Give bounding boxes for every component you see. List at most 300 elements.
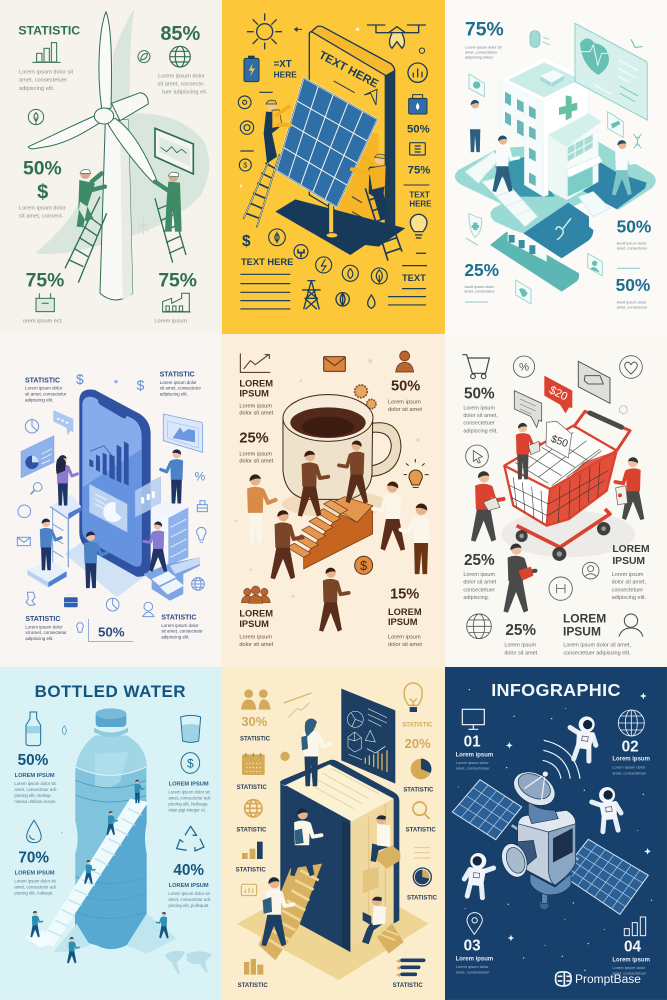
icon: briefcase <box>64 595 78 607</box>
text block: right 2: Lorem ipsum dolor sit <box>168 891 210 896</box>
worker left <box>264 100 290 163</box>
text blocks: statistic: Lorem ipsum dolor <box>25 624 63 629</box>
icon: pill <box>530 31 550 47</box>
phone <box>79 389 151 577</box>
heading: lorem ipsum top left: LOREM <box>239 379 273 389</box>
text block: 75%: adipiscing elieuz <box>465 55 493 59</box>
red box <box>518 567 533 581</box>
syringe <box>466 238 478 245</box>
ring <box>619 406 627 414</box>
text block: 50% upper: amet, consectetur <box>617 246 648 250</box>
label: statistic gold: STATISTIC <box>402 722 433 728</box>
green background shapes <box>35 8 209 254</box>
stat: 20%: 20% <box>405 736 431 751</box>
$50 tag: $50 <box>549 434 569 450</box>
text block: lorem ipsum bottom: Lorem ipsum dolor sit amet, <box>563 643 631 649</box>
icon: bar circle <box>408 63 427 82</box>
building <box>499 57 602 200</box>
stat: 85%: 85% <box>160 23 201 45</box>
text block: 75%: amet, consectetuer <box>465 50 498 54</box>
text block: left 2: Lorem ipsum dolor sit <box>14 878 57 883</box>
text block: 50%: Lorem ipsum <box>463 405 495 411</box>
label: statistic left column <box>236 737 271 989</box>
text block: 50%: adipiscing elit. <box>463 428 498 434</box>
text block: left 2: amet, consectetur adi <box>14 885 56 890</box>
icon: leaf <box>336 293 349 306</box>
monitor panel <box>155 128 193 174</box>
label: statistic left column: STATISTIC <box>238 983 268 989</box>
icon: document <box>410 143 425 155</box>
text blocks: statistic: adipiscing elit. <box>25 397 53 402</box>
platform left top <box>50 494 82 567</box>
label: statistic left column: STATISTIC <box>236 868 266 874</box>
text block: 25%: Aunit ipsum dolor <box>464 285 495 289</box>
canopy <box>566 156 602 177</box>
stairs left <box>465 152 610 227</box>
text block: bottom right: Lorem ipsum <box>154 319 187 325</box>
dots <box>235 359 420 598</box>
text block: lorem ipsum bottom: consectetuer adipiscing elit. <box>563 650 631 656</box>
floating bars card <box>135 477 161 517</box>
number 04: 04 <box>624 939 642 956</box>
text blocks: statistic: Lorem ipsum dolor <box>25 386 63 391</box>
text block: 85%: tuer adipiscing eli. <box>162 90 208 96</box>
walkers <box>30 780 169 963</box>
headings: statistic: STATISTIC <box>25 377 60 384</box>
icon: people <box>241 689 271 710</box>
text blocks: statistic: sit amet, consectetur <box>161 629 203 634</box>
person lower backpack <box>263 897 272 914</box>
solar panel <box>276 78 378 207</box>
icon: person <box>396 351 414 372</box>
astronaut top <box>566 714 600 762</box>
data card <box>575 23 647 120</box>
ground tiles <box>25 914 177 954</box>
icon: calendar <box>242 753 265 775</box>
label: statistic right column: STATISTIC <box>403 788 434 794</box>
billboard label: TEXT HERE <box>317 48 381 91</box>
text block: top left: dolor sit amet <box>239 410 274 416</box>
stat: 30%: 30% <box>241 714 268 729</box>
text block 02: amet, consectetuer <box>612 770 647 775</box>
text block: 50%: Lorem ipsum dolor <box>19 205 66 211</box>
label: statistic right column: STATISTIC <box>406 828 436 834</box>
text block: 50%: sit amet, consect- <box>19 213 63 219</box>
heading: lorem ipsum bottom: IPSUM <box>563 624 601 638</box>
subhead 02: Lorem ipsum <box>612 757 650 763</box>
heading: lorem ipsum bottom right: LOREM <box>388 607 422 617</box>
text block: 50%: dolor sit amet <box>388 407 422 413</box>
text block 01: Lorem ipsum dolor <box>456 760 489 765</box>
person climbing 3 <box>271 510 302 579</box>
heading: lorem ipsum bottom left: IPSUM <box>239 619 269 629</box>
person man tower <box>161 449 183 503</box>
heading: lorem ipsum right: LOREM <box>612 544 650 555</box>
person woman right <box>401 503 430 574</box>
number 01: 01 <box>464 734 481 751</box>
icon: list bars <box>396 959 424 977</box>
dollar glyphs: $ <box>137 377 145 393</box>
dollar glyphs <box>76 371 145 393</box>
stairs right <box>363 845 404 954</box>
building windows <box>505 92 536 186</box>
text blocks: statistic <box>25 380 203 641</box>
ground shadow <box>275 199 405 255</box>
panel: education book <box>222 667 445 1000</box>
stat: 25%: 25% <box>239 430 269 446</box>
icon glyphs <box>472 81 620 297</box>
text block: 75%: Lorem ipsum dolor sit <box>465 46 503 50</box>
marks <box>284 693 311 717</box>
icon: heart badge <box>620 356 642 378</box>
stat: 75% right: 75% <box>158 271 197 292</box>
ground shape <box>455 142 656 258</box>
person mid <box>290 808 321 876</box>
icons: left badges <box>238 92 273 171</box>
icon: heart knot <box>556 218 571 240</box>
floor shadow <box>502 511 635 557</box>
shopping bag <box>616 486 628 505</box>
walker bottom <box>67 937 79 963</box>
person suit <box>504 544 535 613</box>
label: statistic right column <box>393 788 438 989</box>
stat: 50%: 50% <box>464 386 495 403</box>
text block: left 2: piscing elit, Aulisept. <box>14 891 53 896</box>
box left <box>483 497 500 511</box>
image card <box>163 414 203 452</box>
text block: lorem ipsum right: consectetuer <box>612 587 643 593</box>
stat: 70%: 70% <box>18 849 49 866</box>
book <box>280 760 399 952</box>
walker right <box>156 912 169 938</box>
icon: factory <box>163 293 191 312</box>
text block: 50% lower: Aunit ipsum dolor <box>617 300 647 304</box>
icon: team <box>241 586 270 603</box>
icon: battery <box>36 293 54 312</box>
person woman left hair <box>56 458 66 474</box>
icon: cursor badge <box>466 445 488 468</box>
text block: 50% upper: Aunit ipsum dolor <box>617 242 647 246</box>
icon: bulb <box>404 683 422 712</box>
billboard <box>309 26 395 240</box>
label: statistic right column: STATISTIC <box>407 896 438 902</box>
gray tag card <box>578 361 610 403</box>
icon: bars bottom <box>244 959 263 975</box>
green cross <box>559 95 577 121</box>
heading: lorem ipsum right: IPSUM <box>612 556 645 567</box>
support pole <box>326 204 338 238</box>
subhead 01: Lorem ipsum <box>456 753 493 759</box>
stat: 50%: 50% <box>391 379 420 395</box>
icon: monitor <box>462 709 484 729</box>
dot <box>114 380 118 383</box>
icon: envelope <box>324 357 345 371</box>
label: statistic left column: STATISTIC <box>237 785 267 791</box>
number 03: 03 <box>464 937 481 954</box>
heading: lorem ipsum bottom right: IPSUM <box>388 617 418 627</box>
white staircase <box>42 799 148 947</box>
subhead 04: Lorem ipsum <box>612 957 650 963</box>
heading: text here: TEXT HERE <box>241 257 293 267</box>
headings: statistic: STATISTIC <box>161 615 196 622</box>
heading: statistic: STATISTIC <box>18 23 80 37</box>
text block: 50% lower: amet, consectetur <box>617 305 648 309</box>
staircase <box>287 497 373 569</box>
person lower <box>262 877 293 946</box>
gears <box>355 385 376 409</box>
text blocks: statistic: sit amet, consectetur <box>25 391 67 396</box>
panel: coffee teamwork <box>222 334 445 667</box>
walker top <box>135 780 144 803</box>
stat: 75%: 75% <box>408 165 430 177</box>
icon: bottle <box>26 712 41 746</box>
label: text here right <box>404 185 432 209</box>
stat: 75% left: 75% <box>26 271 64 292</box>
text block: 85%: Lorem ipsum dolor <box>158 73 205 79</box>
icon: user outline <box>619 614 643 637</box>
text block: bottom left: dolor sit amet <box>239 642 274 648</box>
lines: text here <box>240 266 427 309</box>
ground diamond <box>237 897 429 980</box>
ladder right <box>365 187 402 261</box>
turbine <box>28 12 157 300</box>
icon: drop <box>27 820 41 843</box>
satellite <box>497 765 578 910</box>
label: text here right: HERE <box>409 200 432 209</box>
person top hair and backpack <box>301 719 317 750</box>
icon: sun <box>247 13 282 49</box>
text block: right 1: piscing elit, Nullsege <box>168 801 208 806</box>
stairs lower left <box>259 864 322 960</box>
text blocks: statistic: sit amet, consectetur <box>160 386 202 391</box>
person man right <box>373 482 405 551</box>
icon: glass <box>181 715 201 742</box>
person walking bottom <box>319 568 349 632</box>
label: statistic left column: STATISTIC <box>236 827 267 833</box>
icon: dollar coin: $ <box>187 756 194 770</box>
icon: power tower <box>302 281 321 309</box>
astronaut left <box>463 852 495 899</box>
panel: hospital <box>445 0 667 334</box>
wing windows <box>568 134 593 197</box>
wing window grid <box>568 139 593 157</box>
text blocks: statistic: Lorem ipsum dolor <box>161 623 199 628</box>
icon: bars <box>242 842 263 859</box>
icon: dollar coin <box>355 556 373 574</box>
icon: chart card <box>241 884 257 896</box>
text block: left 1: piscing elit, Nutlegr <box>14 793 51 798</box>
dot <box>61 832 63 833</box>
icon: molecule <box>631 39 642 47</box>
label: statistic left column: STATISTIC <box>240 737 271 743</box>
label: text here left <box>274 59 297 80</box>
person man ladder <box>40 519 61 570</box>
text block: bottom left: orem ipsum ect. <box>23 319 63 325</box>
stat chart: 50% <box>88 619 133 641</box>
panel: wind turbine <box>0 0 222 334</box>
tower right <box>152 499 188 566</box>
red price bubble <box>544 376 572 413</box>
panel: satellite infographic <box>445 667 667 1000</box>
headings: statistic <box>25 372 196 623</box>
person top <box>303 719 331 786</box>
logo: brain mark <box>556 972 571 986</box>
text block: right 1: vitae pigi integer ut. <box>168 808 206 813</box>
text block 04: amet, consectetuer <box>612 970 647 975</box>
stat: 40%: 40% <box>173 862 204 879</box>
ladder left <box>244 155 279 227</box>
walker upper <box>106 811 117 835</box>
text block: right 2: piscing elit, pullsquat. <box>168 903 209 908</box>
text block 04: Lorem ipsum dolor <box>612 965 646 970</box>
small turbine glyph <box>137 215 150 235</box>
icon: outline cart <box>462 355 489 379</box>
person with bag right <box>615 457 644 520</box>
label: statistic right column: STATISTIC <box>393 983 423 989</box>
stat: 25%: 25% <box>464 260 499 280</box>
subhead: right 1: LOREM IPSUM <box>169 782 209 788</box>
person woman left <box>57 455 77 506</box>
panel: solar energy <box>222 0 445 334</box>
doctor 1 <box>469 100 490 152</box>
icons: bottom badges <box>269 229 387 284</box>
$50 tag <box>546 421 572 458</box>
person woman in cart <box>516 423 539 479</box>
dark floor patches <box>495 157 647 258</box>
icon: location pin <box>467 913 482 934</box>
stat: 75%: 75% <box>465 20 504 41</box>
panel: shopping cart <box>445 334 667 667</box>
percent glyph: % <box>195 470 206 484</box>
solar panel right <box>561 839 648 914</box>
text block: 85%: sit amet, consecte- <box>158 82 205 88</box>
lower slab <box>490 232 579 292</box>
dots <box>240 28 425 187</box>
subhead: left 2: LOREM IPSUM <box>15 870 55 876</box>
text block: bottom left: Lorem ipsum <box>239 634 272 640</box>
stat: 50% lower: 50% <box>616 275 650 295</box>
icon: percent badge: % <box>519 362 529 374</box>
text block: 25%: Lorem ipsum <box>239 452 272 458</box>
phone data card <box>89 484 127 532</box>
walker lower left <box>30 911 43 937</box>
coffee mug <box>283 395 401 499</box>
text block: 25% left: adipiscing. <box>463 595 490 601</box>
ladder right <box>155 198 186 263</box>
icon: bulb <box>410 214 427 253</box>
stat: 50%: 50% <box>18 752 49 769</box>
doctor 2 <box>492 136 519 192</box>
stat: 50%: 50% <box>407 123 430 135</box>
worker left <box>77 169 105 227</box>
text block: bottom right: Lorem ipsum <box>388 634 421 640</box>
text block: lorem ipsum right: dolor sit amet, <box>612 580 647 586</box>
label: text here right: TEXT <box>409 191 430 200</box>
icon cards <box>469 74 623 304</box>
badge dollar: $ <box>243 161 247 170</box>
text block: bottom right: dolor sit amet <box>388 642 422 648</box>
text block: 25% left: consectetuer <box>463 587 495 593</box>
stat: 15%: 15% <box>390 586 419 602</box>
person reading bottom <box>362 896 386 944</box>
icon: lines <box>414 848 430 858</box>
icon: pie badge <box>413 868 431 886</box>
icon: user badge <box>582 562 599 579</box>
stat: 50% upper: 50% <box>617 216 651 236</box>
icon: dollar: $ <box>37 181 48 203</box>
phone bar chart <box>89 441 129 486</box>
icon: dna <box>633 134 642 148</box>
divider <box>465 268 640 302</box>
person mid backpack <box>295 829 304 844</box>
text block: right 1: Lorem ipsum dolor sit <box>168 789 210 794</box>
signal arcs <box>543 740 580 779</box>
heading: lorem ipsum bottom left: LOREM <box>239 609 273 619</box>
text blocks: statistic: adipiscing elit. <box>161 635 189 640</box>
coin <box>280 752 290 761</box>
subhead: right 2: LOREM IPSUM <box>169 883 209 889</box>
icon: line chart <box>240 353 270 372</box>
label: text here left: HERE <box>274 70 297 80</box>
icon: leaf badge <box>138 51 150 63</box>
icon: globe <box>467 614 491 639</box>
icon: globe <box>170 46 190 67</box>
logo: promptbase: PromptBase <box>575 972 641 986</box>
text block: 50%: dolor sit amet, <box>463 413 498 419</box>
icon: bar chart <box>32 43 61 62</box>
icon: dollar coin: $ <box>360 559 367 573</box>
text block: top left: Lorem ipsum <box>239 403 272 409</box>
heading: lorem ipsum bottom: LOREM <box>563 612 606 626</box>
dollar glyphs: $ <box>76 371 84 387</box>
text blocks: statistic: adipiscing elit. <box>160 392 188 397</box>
icon: bars <box>624 917 646 936</box>
text block: statistic: adipiscing elit. <box>19 86 55 92</box>
solar panel left <box>452 780 522 840</box>
text block: lorem ipsum right: Lorem ipsum <box>612 572 644 578</box>
icon: arrow <box>295 28 302 31</box>
text block: 25% left: dolor sit amet <box>463 580 497 586</box>
headings: statistic: STATISTIC <box>160 372 195 379</box>
text block 02: Lorem ipsum dolor <box>612 764 646 769</box>
gray chat bubble <box>514 391 542 427</box>
stat: 25% bottom: 25% <box>505 622 536 639</box>
astronaut right <box>590 786 623 833</box>
text block: right 2: amet, consectetur adi- <box>168 897 212 902</box>
icon: sliders badge <box>549 577 572 600</box>
person woman left <box>247 474 275 543</box>
text block: 25% left: Lorem ipsum <box>463 572 495 578</box>
stars <box>458 689 652 971</box>
floor platform <box>65 537 150 597</box>
text block: 25%: dolor sit amet <box>239 459 274 465</box>
worker right <box>352 154 389 220</box>
text block: left 1: amet, consectetur adi- <box>14 787 58 792</box>
sparkle stars <box>506 693 651 941</box>
person climbing 2 <box>339 441 368 503</box>
panel: mobile finance <box>0 334 222 667</box>
text block: left 1: Lorem ipsum dolor sit <box>14 781 57 786</box>
text block: 50%: consectetuer <box>463 421 495 427</box>
headings: statistic: STATISTIC <box>25 616 60 623</box>
stat: 25% left: 25% <box>464 552 495 569</box>
icon: pie <box>411 759 431 779</box>
icon: dollar coin <box>181 753 200 773</box>
ladder left <box>65 197 107 283</box>
platform left bottom <box>27 561 67 587</box>
icon: globe <box>618 710 644 736</box>
text block: 25% bottom: dolor sit amet <box>504 650 538 656</box>
